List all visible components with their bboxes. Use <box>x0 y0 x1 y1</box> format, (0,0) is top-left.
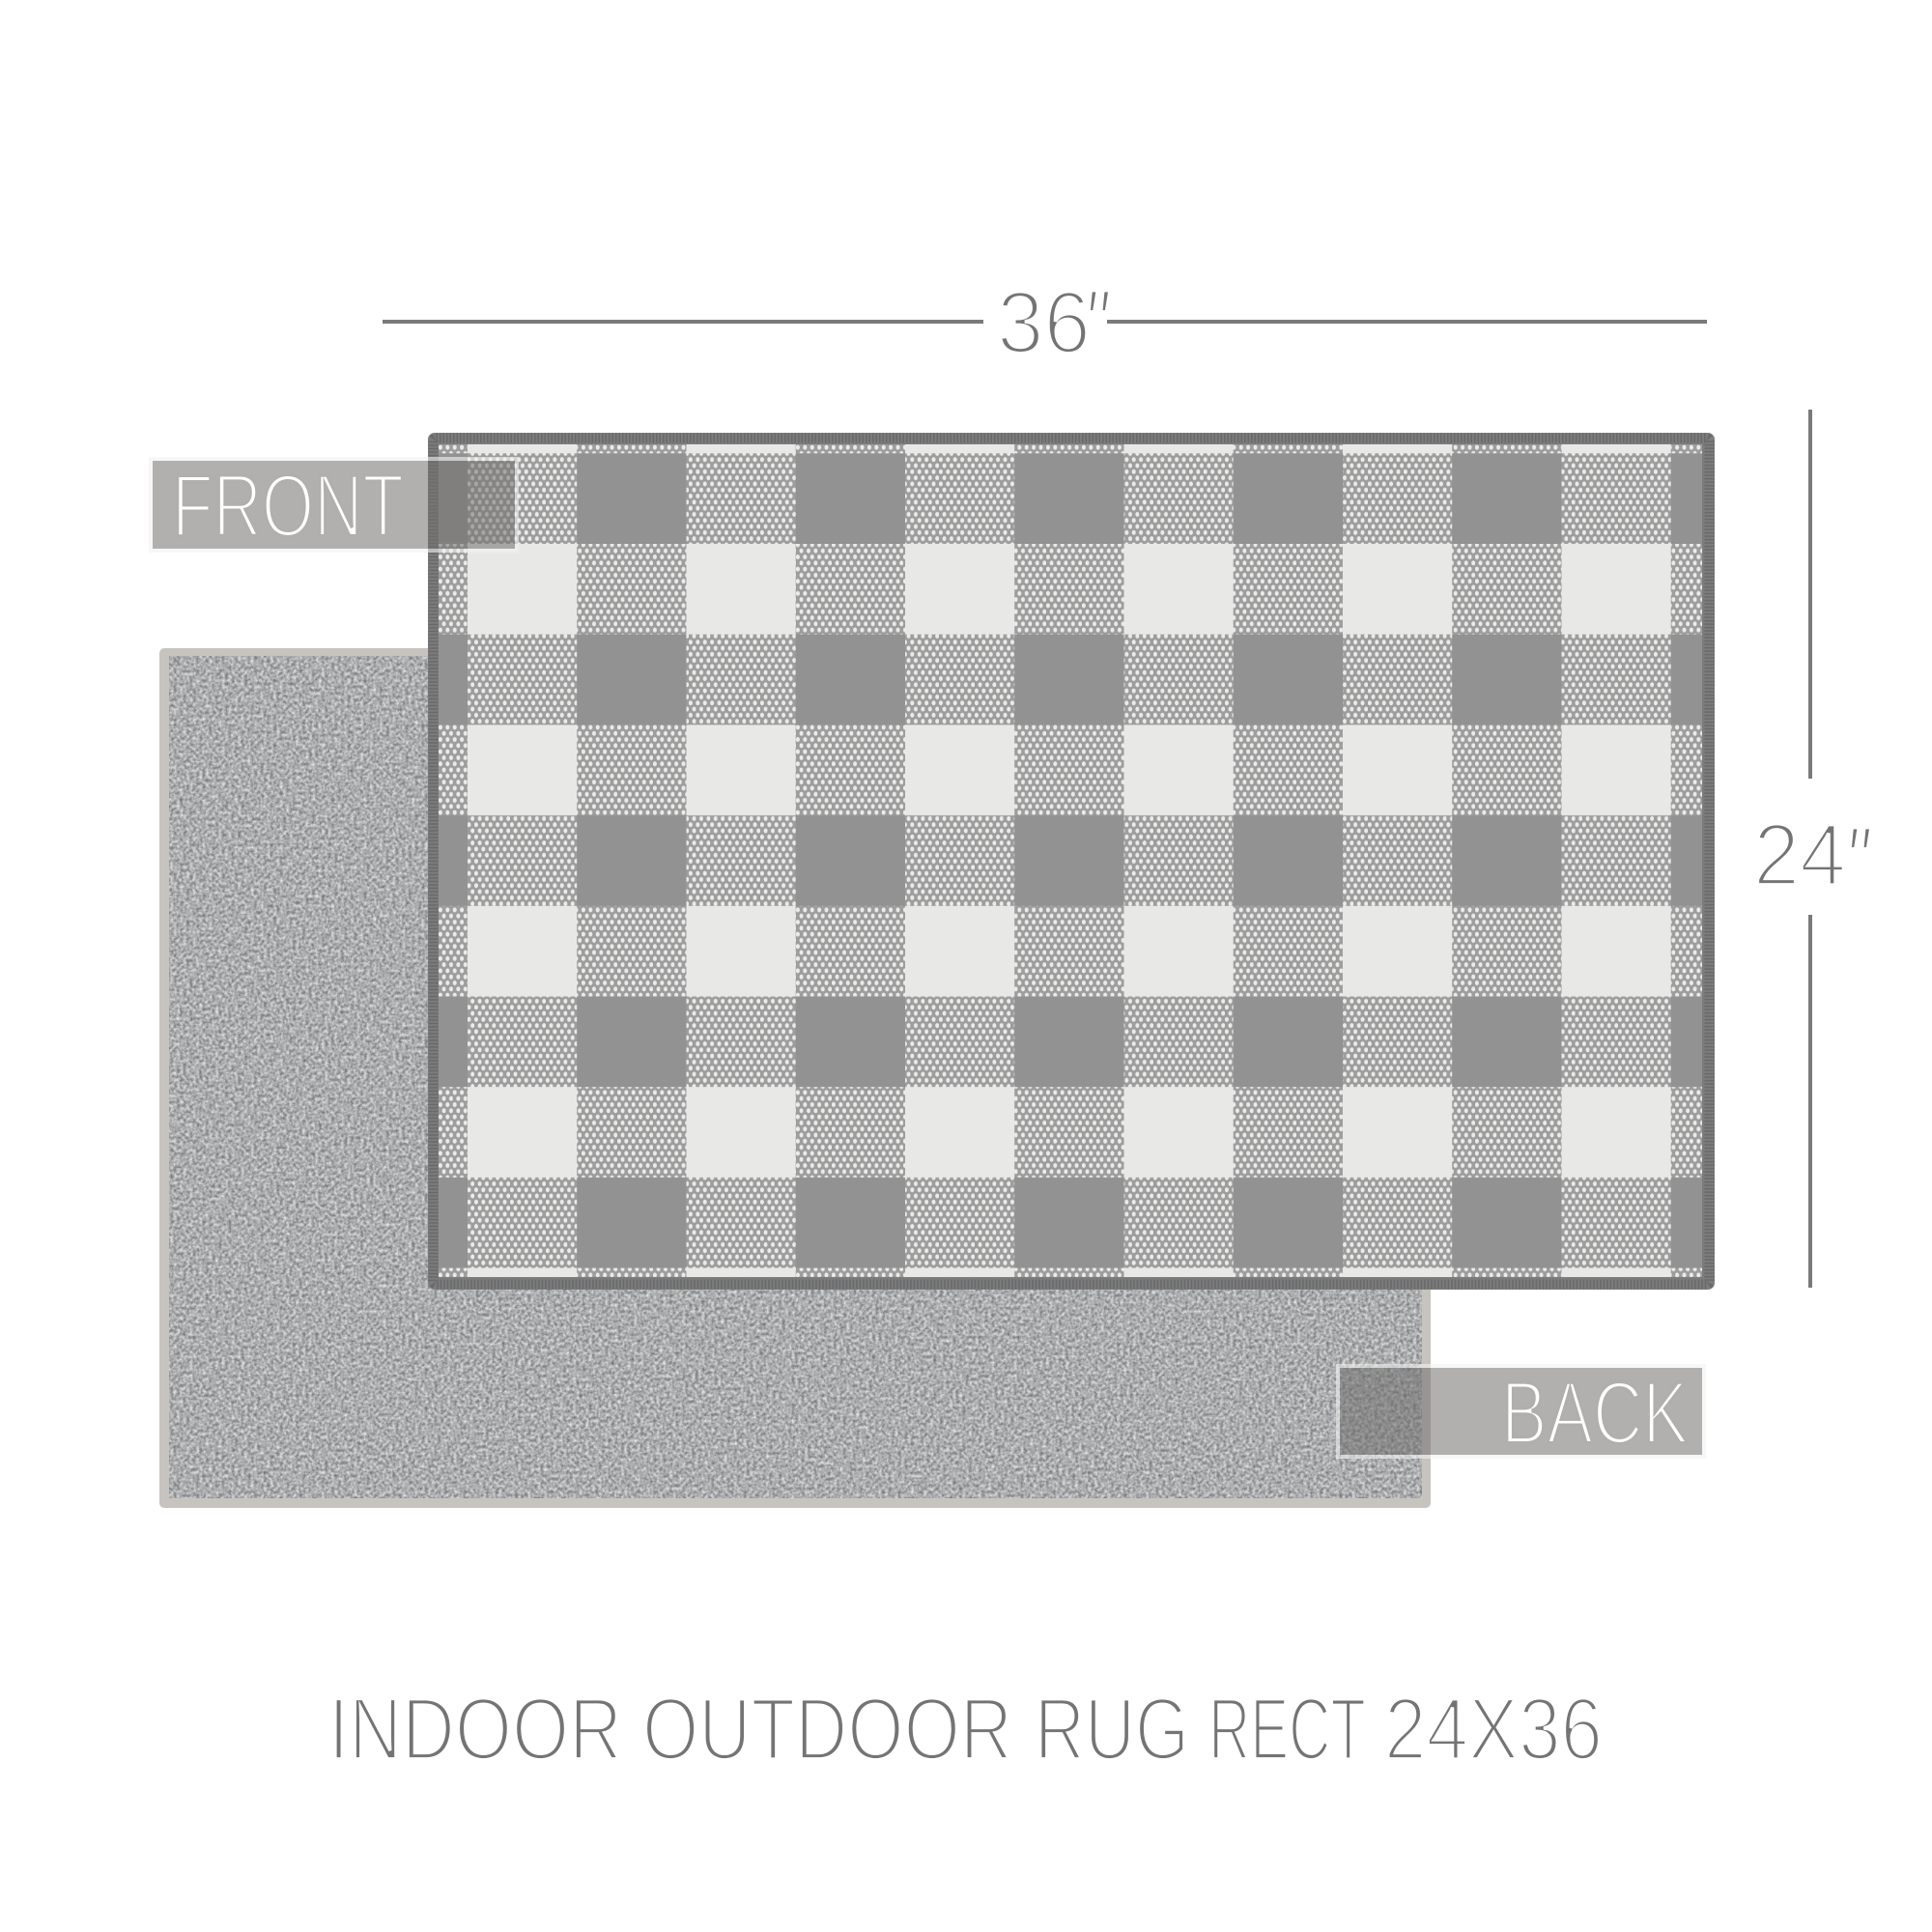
label: front: FRONT <box>172 457 404 555</box>
back rug woven texture <box>169 656 1422 1498</box>
width dimension: 36 inches <box>383 270 1707 382</box>
height dimension: 24 inches: " <box>1844 807 1871 919</box>
height dimension: 24 inches <box>1753 410 1871 1288</box>
width dimension: 36 inches: 36 <box>997 274 1091 372</box>
label: back: BACK <box>1501 1364 1689 1463</box>
height dimension: 24 inches: 24 <box>1753 807 1846 904</box>
front rug binding <box>428 433 1715 1290</box>
buffalo check squares <box>439 444 1702 1277</box>
width dimension: 36 inches: " <box>1083 270 1110 382</box>
product title: INDOOR <box>328 1681 622 1778</box>
product title: 24X36 <box>1384 1681 1603 1778</box>
front of rug <box>428 433 1715 1290</box>
product title: RUG <box>1035 1681 1189 1778</box>
product title <box>328 1681 1603 1778</box>
back rug binding <box>159 648 1431 1508</box>
product title: OUTDOOR <box>642 1681 1012 1778</box>
binding stitches <box>433 439 1710 1285</box>
product title: RECT <box>1208 1681 1366 1778</box>
back of rug <box>159 648 1431 1508</box>
label: back <box>1338 1364 1704 1463</box>
woven mesh base <box>439 444 1702 1277</box>
